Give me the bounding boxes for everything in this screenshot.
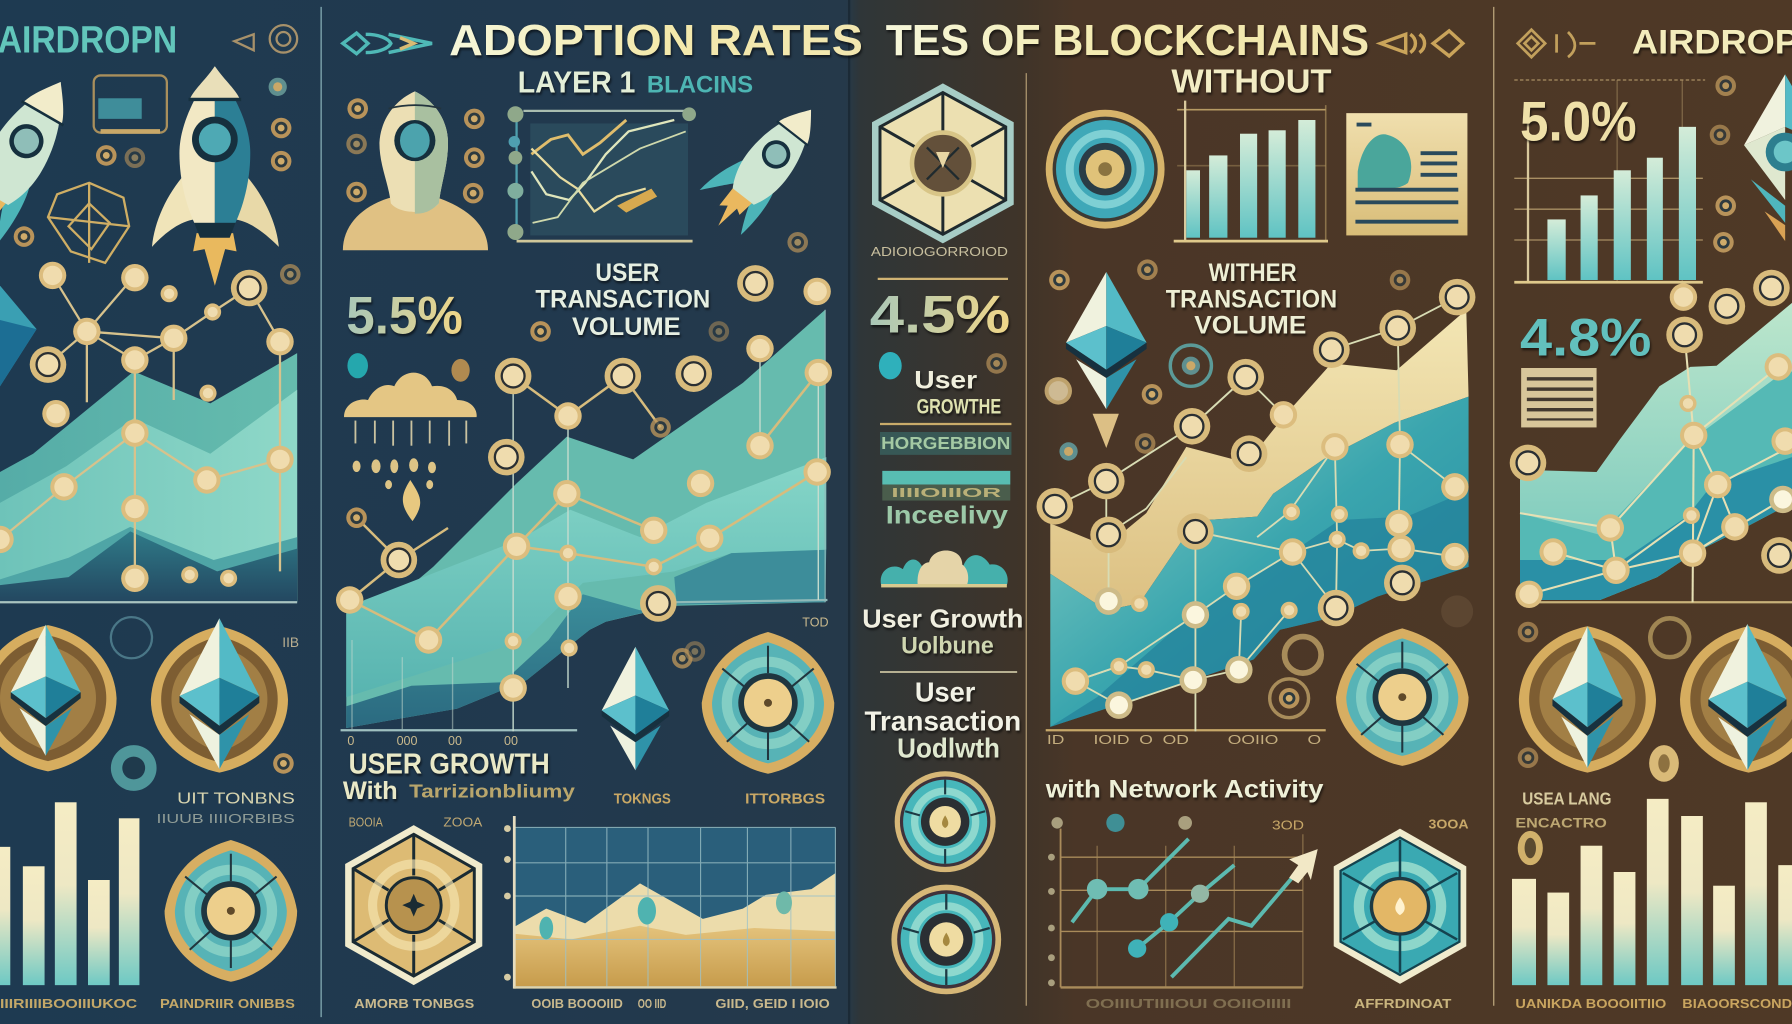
text: user transaction volume	[535, 259, 710, 341]
icon: eth gem panel three	[1066, 272, 1147, 448]
text: user transaction center: Uodlwth	[897, 733, 1000, 764]
icon: striped list	[1521, 368, 1597, 427]
text: panel three footer and year	[1086, 818, 1469, 1011]
icon: right header ornaments	[1518, 30, 1595, 57]
text: year labels: ZOOA	[443, 815, 483, 829]
chart: panel four main area	[1510, 270, 1792, 608]
percent: 4.5: 4.5%	[870, 286, 1010, 345]
chart: panel one area network	[0, 262, 297, 602]
chart: ticks panel three: ID IOID O OD OOIIO O	[1047, 733, 1321, 747]
icon: round badge upper	[895, 771, 996, 872]
heading: layer 1 blockchains: BLACINS	[647, 72, 753, 99]
text: panel three footer and year: 3OOA	[1429, 818, 1469, 832]
text: panel two footer labels: AMORB TONBGS	[354, 997, 474, 1011]
text: panel two footer labels: OOIB BOOOIID	[531, 997, 623, 1011]
icon: title ornament right	[1381, 31, 1463, 56]
text: ui tokens labels	[157, 790, 295, 826]
chart: tick labels panel two: 00	[504, 734, 518, 748]
text: adoption subtitle: ADIOIOGORROIOD	[871, 245, 1008, 259]
icon: eth coin three	[1519, 626, 1656, 773]
title	[449, 17, 1369, 65]
icon: user avatar	[343, 91, 488, 250]
text: user transaction volume: VOLUME	[572, 313, 681, 341]
heading: airdrop left: AIRDROPN	[0, 19, 177, 61]
text: user growth volume	[862, 603, 1023, 660]
text: panel three footer and year: AFFRDINOAT	[1354, 997, 1452, 1011]
text: panel one footer labels	[0, 997, 295, 1011]
heading: user growth with functionality: With	[343, 777, 398, 805]
text: user transaction volume: USER	[595, 259, 659, 287]
chart: multi-line mini chart	[507, 106, 696, 241]
heading: user growth with functionality: ITTORBGS	[745, 791, 825, 807]
icon: small doodads panel one	[14, 75, 301, 285]
icon: doodads panel four top	[1710, 75, 1736, 253]
chart: panel three main area	[1037, 279, 1475, 731]
icon: doodads gem panel two	[672, 641, 705, 669]
text: user transaction volume: TRANSACTION	[535, 285, 710, 313]
text: wither transaction volume: VOLUME	[1194, 312, 1306, 340]
text: user engagement labels	[1515, 789, 1611, 830]
icon: big rocket	[152, 66, 279, 286]
text: user growth volume: User Growth	[862, 603, 1023, 633]
text: ui tokens labels: IIUUB IIIIORBIBS	[157, 812, 295, 826]
icon: hex teal	[1334, 829, 1466, 984]
text: user growth center column: GROWTHE	[917, 394, 1001, 419]
icon: doodads beside avatar	[346, 98, 808, 253]
chart: tick labels panel two: TOD	[802, 615, 829, 629]
icon: clouds center	[881, 551, 1008, 587]
icon: gold network polygon	[48, 183, 129, 263]
title: ADOPTION RATES	[449, 17, 863, 65]
text: panel two footer labels: OO IID	[638, 997, 666, 1011]
text: panel three footer and year: OOIIIUTIIIIOUI OOIIOIIIII	[1086, 997, 1291, 1011]
icon: cloud with rain	[344, 353, 477, 521]
icon: doodads coin row: IIB	[282, 635, 299, 650]
text: user engagement labels: ENCACTRO	[1515, 815, 1607, 830]
heading: user growth with functionality	[343, 749, 825, 807]
chart: network activity lines	[1048, 814, 1318, 987]
bar chart: panel four bottom	[1512, 799, 1792, 985]
text: user growth center column: User	[914, 367, 977, 395]
chart: gold area grid	[504, 816, 837, 989]
text: user growth center column	[879, 352, 1011, 424]
icon: eth coin four	[1680, 624, 1792, 773]
chart: tick labels panel two: 000	[397, 734, 418, 748]
chart: tick labels panel two: 00	[448, 734, 462, 748]
percent: 5.5: 5.5%	[346, 287, 463, 346]
text: year labels	[349, 815, 483, 829]
text: panel two footer labels: GIID, GEID I IOIO	[715, 997, 830, 1011]
text: panel one footer labels: IIIRIIIIBOOIIIUKOC	[0, 997, 137, 1011]
chart: tick labels panel two: 0	[347, 734, 354, 748]
icon: shield badge panel one	[165, 840, 297, 982]
text: user transaction center: User	[915, 677, 976, 708]
icon: eth coin one	[0, 625, 117, 771]
icon: title ornament left	[343, 33, 432, 54]
percent: 4.8: 4.8%	[1520, 308, 1651, 367]
text: panel four footer labels: UANIKDA BOOOIITIIO	[1515, 997, 1667, 1011]
icon: small coin label	[1518, 831, 1543, 865]
icon: round target badge	[1046, 110, 1165, 229]
heading: without: WITHOUT	[1171, 64, 1331, 101]
gem partial left	[0, 272, 37, 386]
icon: doodads coin row	[111, 617, 299, 774]
icon: doodads panel three	[1045, 259, 1410, 461]
icon: badge panel three	[1336, 628, 1469, 766]
heading: airdrop right: AIRDROP	[1632, 24, 1792, 62]
heading: layer 1 blockchains: LAYER 1	[518, 65, 635, 100]
text: user engagement labels: USEA LANG	[1522, 789, 1611, 809]
icon: eth coin two	[151, 618, 288, 773]
icon: eth gem panel two	[602, 647, 669, 770]
text: wither transaction volume: TRANSACTION	[1166, 285, 1337, 313]
icon: shield badge panel two	[702, 632, 834, 774]
chart: tick labels panel two	[347, 615, 829, 748]
icon: teal rocket	[689, 86, 830, 242]
title: TES OF BLOCKCHAINS	[886, 17, 1369, 65]
text: banded incentive labels: Inceelivy	[886, 501, 1008, 529]
text: panel two footer labels	[354, 997, 830, 1011]
heading: user growth with functionality: TOKNGS	[614, 791, 671, 807]
heading: user growth with functionality: Tarrizionbliumy	[409, 781, 576, 802]
text: banded incentive labels: IIIIOIIIOR	[891, 486, 1001, 500]
text: wither transaction volume	[1166, 259, 1337, 340]
text: user transaction center	[865, 672, 1021, 764]
icon: eth gem panel four	[1744, 74, 1792, 241]
icon: hexagon web	[872, 83, 1014, 243]
chart: panel two main area	[336, 265, 832, 731]
percent: 5.0: 5.0%	[1520, 90, 1637, 153]
icon: hexagon gold	[345, 825, 482, 985]
bar chart: panel one bottom	[0, 802, 139, 985]
text: user growth volume: Uolbune	[901, 633, 994, 660]
heading: user growth with functionality: USER GROWTH	[349, 749, 550, 781]
chart: network activity lines: 3OD	[1272, 819, 1304, 833]
heading: layer 1 blockchains	[518, 65, 753, 100]
icon: partial rocket left	[0, 59, 86, 251]
icon: header ornaments	[234, 25, 297, 53]
text: ui tokens labels: UIT TONBNS	[177, 790, 295, 807]
icon: document card	[1346, 113, 1467, 235]
text: panel four footer labels: BIAOORSCOND	[1682, 997, 1792, 1011]
icon: doodads coin row right	[1518, 618, 1689, 782]
text: banded incentive labels: HORGEBBION	[881, 433, 1010, 453]
text: user transaction center: Transaction	[865, 705, 1021, 736]
bar chart: panel three top	[1174, 101, 1328, 241]
text: wither transaction volume: WITHER	[1209, 259, 1297, 287]
icon: small ring teal	[111, 745, 157, 791]
text: panel one footer labels: PAINDRIIR ONIBBS	[160, 997, 295, 1011]
text: year labels: BOOIA	[349, 815, 383, 829]
icon: doodads badge panel three	[1270, 595, 1473, 718]
heading: with network activity: with Network Activity	[1045, 776, 1323, 804]
icon: round badge lower	[891, 885, 1001, 994]
panel: airdrop left header	[0, 19, 297, 61]
text: panel four footer labels	[1515, 997, 1792, 1011]
panel dividers	[321, 0, 1494, 1024]
bar chart: panel four top	[1514, 80, 1705, 282]
text: banded incentive labels	[880, 432, 1011, 529]
